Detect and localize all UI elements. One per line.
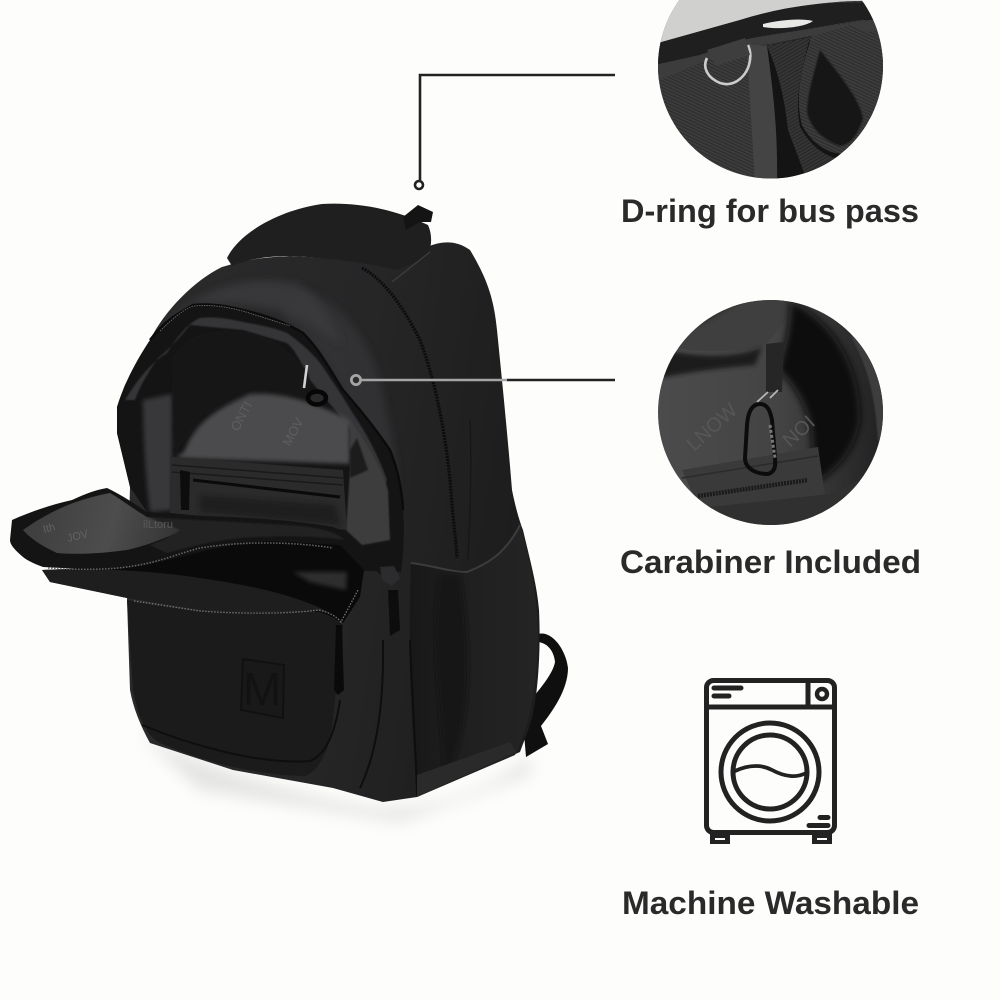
- anchor dot: [415, 181, 423, 189]
- ground shadow: [135, 730, 530, 822]
- upper fold shadow: [660, 347, 762, 378]
- folded flap: [10, 488, 385, 578]
- dark inner shadow: [807, 50, 863, 146]
- centre black fold: [766, 36, 841, 178]
- wordmark centre: JOV: [66, 528, 90, 545]
- door outer ring: [721, 723, 819, 821]
- leader line: [420, 75, 615, 180]
- D-ring loop: [705, 45, 750, 84]
- right edge lighter fabric: [851, 336, 883, 442]
- side pocket fabric: [410, 525, 538, 797]
- carabiner gate: [770, 425, 775, 458]
- heading: D-ring for bus pass: D-ring for bus pass: [621, 193, 919, 229]
- flap zipper: [48, 543, 333, 569]
- liner base: [658, 300, 883, 525]
- bottom zip pocket: [682, 447, 825, 510]
- main side zipper pull: [380, 566, 400, 586]
- top fabric folds: [678, 300, 796, 351]
- top strap: [658, 2, 874, 64]
- rim fold: [125, 317, 387, 488]
- left pocket wall: [143, 394, 172, 512]
- dark right fold: [778, 300, 860, 490]
- right mesh panel: [810, 26, 883, 150]
- callout line: carabiner: [351, 375, 615, 385]
- interior dark zone: [172, 331, 312, 455]
- callout line: D-ring: [415, 75, 615, 189]
- knob panel divider: [806, 680, 810, 707]
- control panel divider: [706, 704, 835, 710]
- front pocket seam: [142, 700, 340, 762]
- flap liner: [23, 493, 200, 554]
- wordmark right: MOV: [279, 415, 307, 448]
- webbing strip: [747, 44, 777, 185]
- front zipper pull: [334, 625, 344, 695]
- wordmark right: ilLtoru: [143, 519, 173, 531]
- pocket zipper: [698, 480, 808, 496]
- rim zipper highlight: [160, 305, 290, 331]
- heading: Carabiner Included: Carabiner Included: [620, 544, 921, 580]
- main zipper pull: [388, 590, 400, 636]
- left foot: [710, 834, 730, 844]
- webbing loop: [766, 342, 784, 392]
- lit liner: [175, 394, 350, 464]
- body front seams: [360, 640, 417, 795]
- icon: washing machine: [706, 680, 835, 844]
- liner wordmarks: [686, 402, 815, 450]
- knob: [817, 689, 827, 699]
- anchor dot: [351, 375, 361, 385]
- photo circle: D-ring detail: [658, 0, 883, 178]
- lower pocket cavity: [42, 540, 364, 623]
- wordmark right: NOI: [779, 412, 820, 452]
- zipper tag top: [403, 205, 433, 230]
- second vertical seam: [468, 420, 471, 560]
- machine body: [706, 680, 834, 832]
- centre mesh flap: [767, 37, 835, 175]
- patch letter: M: [243, 663, 281, 715]
- inner zip pocket: [170, 457, 347, 530]
- right liner panel: [346, 420, 390, 545]
- bottom dark zone: [710, 480, 860, 525]
- door inner ring: [733, 735, 807, 809]
- indicator lines: [809, 818, 828, 826]
- wordmark left: ONTI: [227, 399, 255, 433]
- open pocket cavity: [117, 304, 404, 572]
- wordmark left: Ith: [42, 521, 57, 536]
- front pocket zipper: [134, 590, 358, 622]
- light line segment: [362, 379, 507, 381]
- display lines: [714, 688, 741, 696]
- fabric tab: [707, 38, 750, 66]
- cavity highlight: [293, 572, 347, 590]
- mesh base: [658, 0, 883, 178]
- light backdrop: [660, 0, 862, 42]
- flap wordmarks: [42, 519, 173, 545]
- white handle glimpse: [763, 20, 813, 28]
- rim zipper line: [150, 304, 403, 510]
- liner wordmarks: [227, 399, 307, 448]
- patch square: [241, 659, 284, 718]
- photo circle: carabiner detail: [658, 300, 883, 525]
- upper hood highlight: [165, 281, 342, 345]
- main vertical zipper: [362, 268, 457, 558]
- heading: Machine Washable: Machine Washable: [622, 885, 919, 921]
- right foot: [812, 834, 832, 844]
- main body shell: [117, 242, 540, 802]
- carabiner in pocket: [304, 365, 326, 404]
- right liner shadow: [350, 438, 368, 478]
- inner pocket stitching: [172, 465, 343, 485]
- handle underside seam: [392, 252, 430, 282]
- wordmark left: LNOW: [683, 399, 742, 456]
- carabiner black loop: [308, 392, 326, 404]
- silver link: [757, 390, 778, 402]
- top carry handle: [227, 204, 431, 270]
- side pocket pleat: [436, 575, 468, 780]
- shell highlight: [280, 290, 397, 520]
- side pocket elastic: [411, 525, 520, 572]
- inner pocket zipper: [193, 480, 340, 497]
- backpack illustration: [10, 204, 568, 822]
- base panel: [417, 742, 516, 797]
- back shoulder strap: [522, 633, 568, 757]
- dark line segment: [507, 379, 615, 381]
- flap dark upper liner: [147, 517, 345, 553]
- lower strap band: [658, 20, 878, 80]
- pocket stitching: [682, 456, 818, 478]
- logo patch: [241, 659, 284, 718]
- top left dark: [700, 306, 735, 324]
- inner pocket pull: [180, 470, 190, 510]
- front pocket panel: [127, 600, 343, 776]
- inner pocket lower wrinkles: [200, 495, 340, 525]
- black carabiner: [745, 404, 775, 474]
- water wave: [735, 766, 806, 776]
- lower fold: [42, 569, 332, 614]
- carabiner silver gate: [304, 365, 307, 388]
